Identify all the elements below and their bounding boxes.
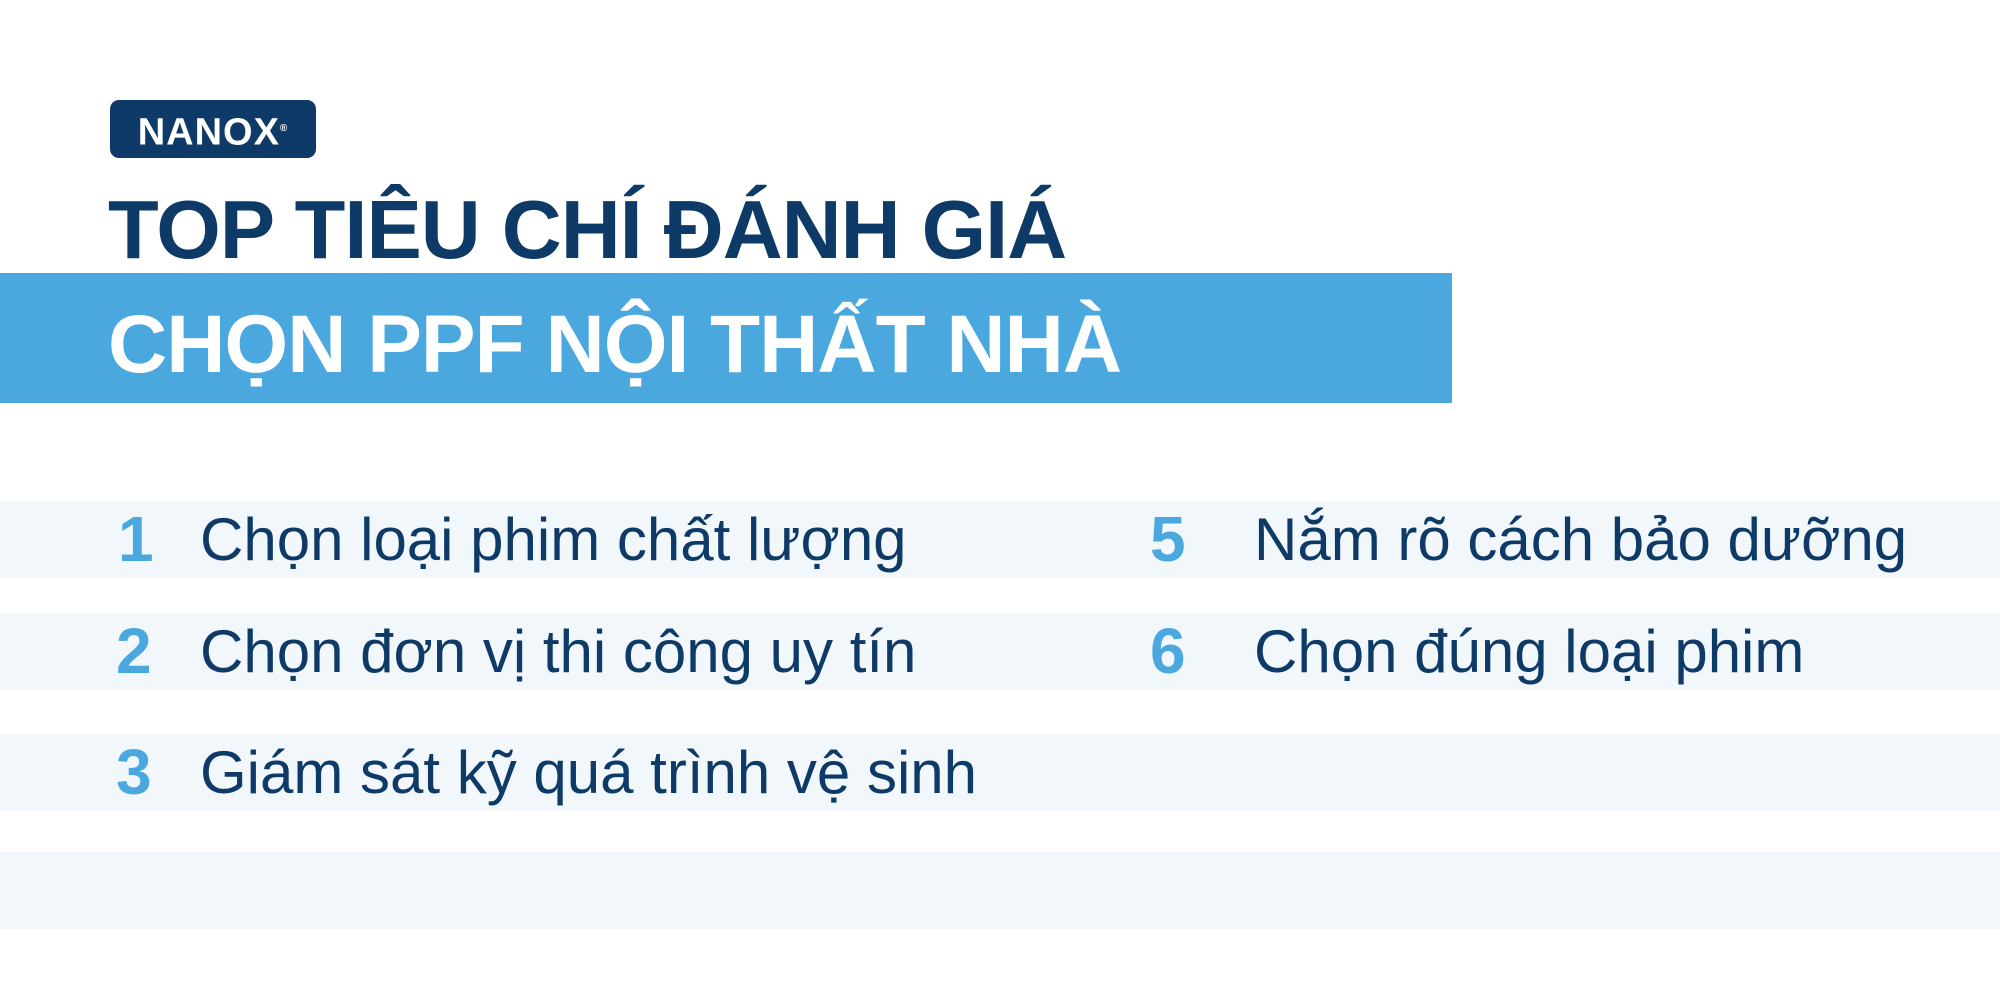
title line 2: CHỌN PPF NỘI THẤT NHÀ xyxy=(108,299,1121,390)
row 3: Giám sát kỹ quá trình vệ sinh xyxy=(200,739,977,806)
item 6: 6 xyxy=(1150,615,1186,687)
row 1: Nắm rõ cách bảo dưỡng xyxy=(1254,506,1907,573)
row 2 xyxy=(0,613,2000,690)
item 1: 1 xyxy=(118,503,154,575)
row 4 xyxy=(0,852,2000,929)
item 2: 2 xyxy=(116,615,152,687)
item 5: 5 xyxy=(1150,503,1186,575)
row 2: Chọn đơn vị thi công uy tín xyxy=(200,618,916,685)
item 3: 3 xyxy=(116,736,152,808)
row 1 xyxy=(0,501,2000,578)
row 1: Chọn loại phim chất lượng xyxy=(200,506,907,573)
logo xyxy=(110,100,316,158)
row 2: Chọn đúng loại phim xyxy=(1254,618,1804,685)
logo: NANOX® xyxy=(138,112,288,154)
title band xyxy=(0,273,1452,403)
row 3 xyxy=(0,734,2000,811)
title line 1: TOP TIÊU CHÍ ĐÁNH GIÁ xyxy=(108,183,1066,276)
